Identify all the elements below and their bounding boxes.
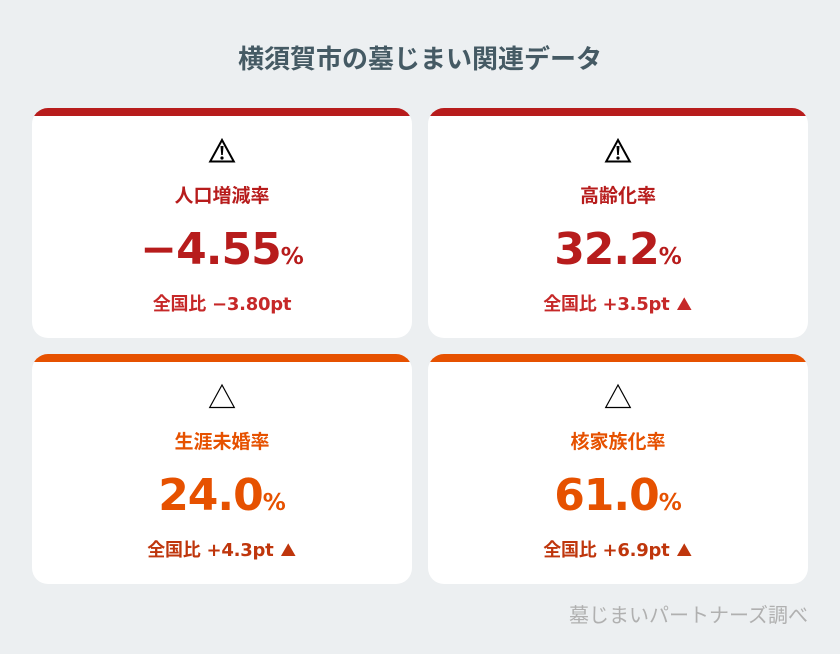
comparison: lifetime unmarried rate: 全国比 +4.3pt ▲ [147, 539, 296, 561]
comparison: aging rate: 全国比 +3.5pt ▲ [543, 293, 692, 315]
icon: warning [208, 138, 236, 162]
comparison: population change rate: 全国比 −3.80pt [153, 294, 291, 315]
label: population change rate: 人口増減率 [174, 185, 270, 207]
value: nuclear family rate: 61.0% [554, 470, 682, 521]
panel: lifetime unmarried rate [32, 354, 412, 584]
icon: triangle [604, 384, 632, 408]
value: population change rate: −4.55% [140, 224, 304, 275]
panel: population change rate [32, 108, 412, 338]
accent bar [428, 354, 808, 362]
panel: aging rate [428, 108, 808, 338]
label: aging rate: 高齢化率 [580, 185, 656, 207]
value: lifetime unmarried rate: 24.0% [158, 470, 286, 521]
source note: 墓じまいパートナーズ調べ [569, 603, 808, 627]
title: 横須賀市の墓じまい関連データ [238, 45, 602, 75]
label: lifetime unmarried rate: 生涯未婚率 [174, 431, 270, 453]
accent bar [32, 354, 412, 362]
icon: warning [604, 138, 632, 162]
label: nuclear family rate: 核家族化率 [570, 431, 666, 453]
value: aging rate: 32.2% [554, 224, 682, 275]
panel: nuclear family rate [428, 354, 808, 584]
comparison: nuclear family rate: 全国比 +6.9pt ▲ [543, 539, 692, 561]
accent bar [428, 108, 808, 116]
icon: triangle [208, 384, 236, 408]
accent bar [32, 108, 412, 116]
